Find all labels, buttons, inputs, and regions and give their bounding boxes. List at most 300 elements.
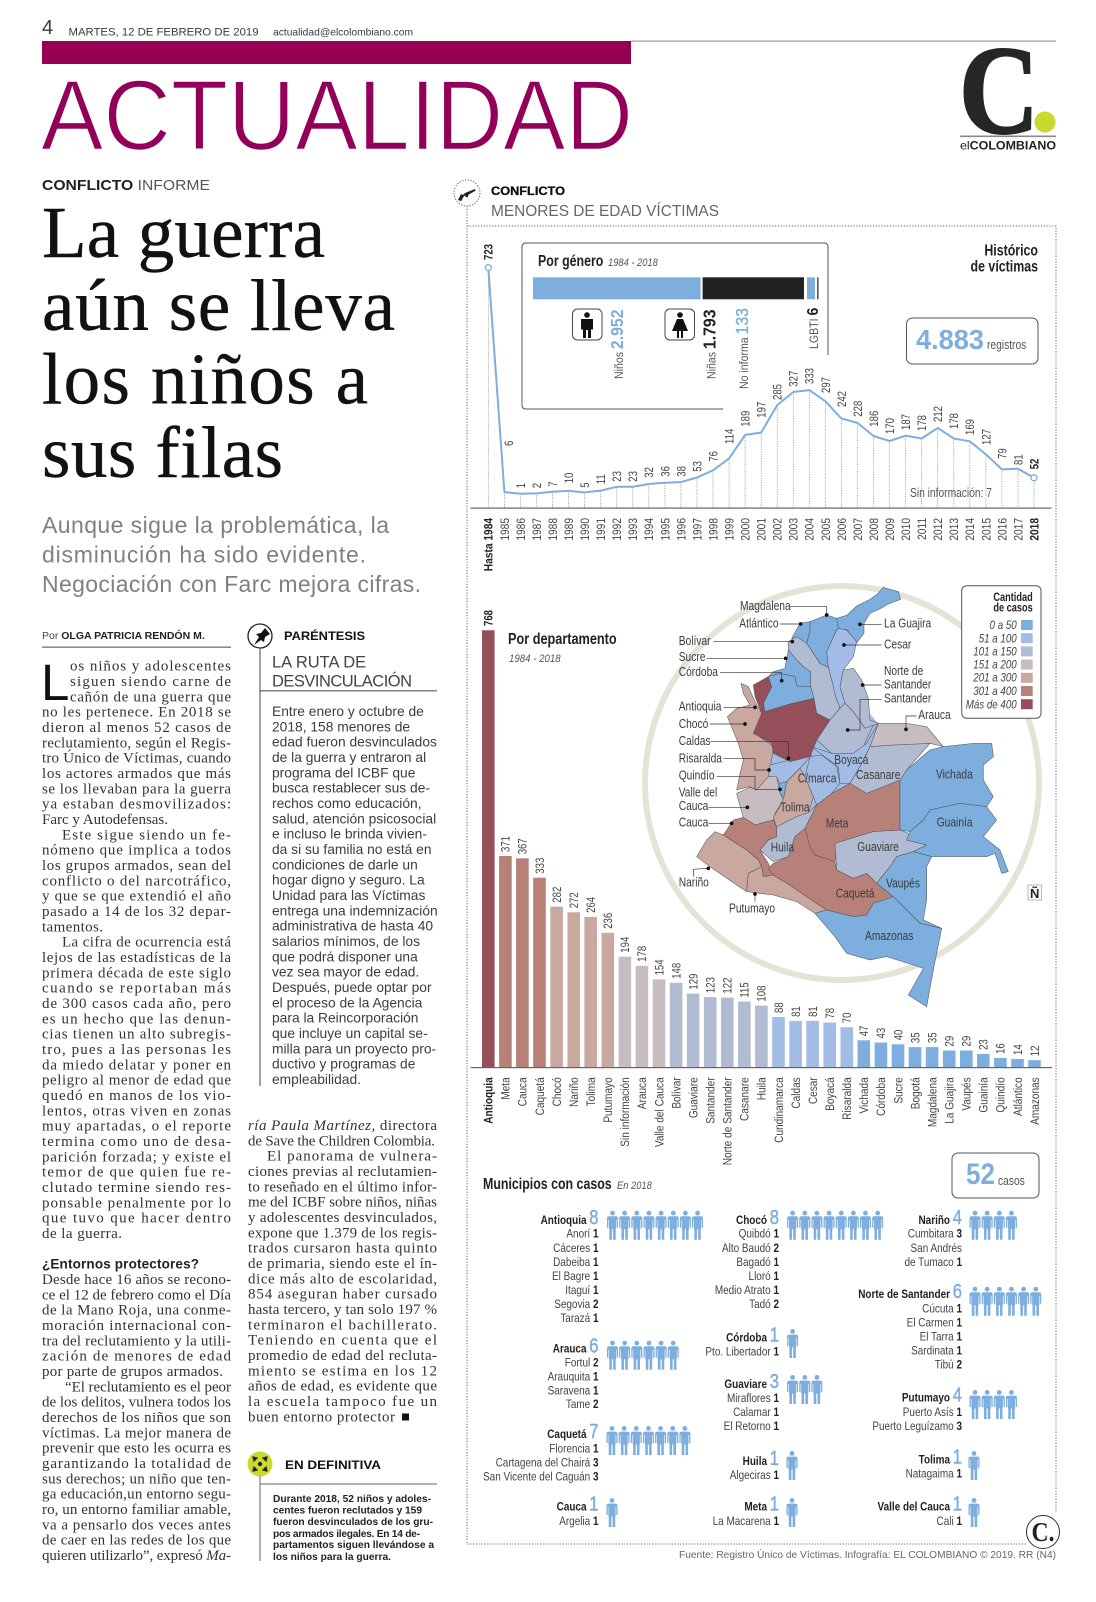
chart value labels: 5 xyxy=(579,482,592,488)
municipios: Caquetá: Caquetá 7 xyxy=(547,1420,598,1442)
map labels: Vichada xyxy=(936,769,973,782)
section title: ACTUALIDAD xyxy=(41,60,633,170)
bar value labels: 43 xyxy=(875,1028,889,1038)
rotated gender figures: Niños 2.952 xyxy=(607,309,627,379)
chart value labels: 76 xyxy=(707,451,721,462)
chart year axis labels: 2017 xyxy=(1013,518,1026,541)
callout: 4.883 registros: 4.883 xyxy=(916,324,984,355)
map labels: Cauca xyxy=(679,800,709,813)
page header strip: 4 xyxy=(42,17,53,39)
map labels: Vaupés xyxy=(886,878,920,891)
callout: 52 casos: casos xyxy=(998,1175,1025,1188)
chart value labels: 189 xyxy=(740,411,753,427)
map leader lines xyxy=(693,607,917,902)
department names: Bolívar xyxy=(671,1077,684,1109)
callout: 4.883 registros xyxy=(906,318,1038,364)
article column 1: dieron al menos 52 casos de xyxy=(42,720,231,736)
chart year axis labels: 2007 xyxy=(852,518,865,541)
article column 1: tro, pues a las personas les xyxy=(42,1042,231,1058)
callout: 52 casos: 52 xyxy=(966,1158,995,1191)
municipios: Córdoba: Pto. Libertador 1 xyxy=(705,1346,779,1359)
chart value labels: 38 xyxy=(675,466,689,477)
bar value labels: 23 xyxy=(978,1039,991,1050)
chart year axis labels: 2012 xyxy=(932,518,945,541)
panel: paréntesis: edad fueron desvinculados xyxy=(272,735,437,750)
article column 1: “El reclutamiento es el peor xyxy=(65,1379,231,1395)
article column 1: cuando se reportaban más xyxy=(42,981,231,997)
bar value labels: 154 xyxy=(653,959,667,975)
municipios: Huila xyxy=(730,1447,798,1482)
chart year axis labels: 1996 xyxy=(676,518,689,541)
department names: Guainía xyxy=(978,1077,991,1113)
bar value labels: 108 xyxy=(756,986,769,1002)
map legend: 0 a 50 xyxy=(990,619,1017,632)
article column 1: La cifra de ocurrencia está xyxy=(62,935,231,951)
panel: paréntesis xyxy=(248,624,438,1087)
map legend: Más de 400 xyxy=(966,699,1017,712)
chart value labels: 186 xyxy=(868,411,881,427)
municipios: Norte de Santander: Norte de Santander 6 xyxy=(858,1280,962,1302)
bar value labels: 35 xyxy=(909,1032,923,1043)
subheading: ¿Entornos protectores? xyxy=(42,1256,199,1272)
headline xyxy=(42,192,395,493)
department names xyxy=(483,1077,1042,1165)
article column 1: moración internacional con- xyxy=(42,1318,231,1334)
bar value labels: 81 xyxy=(790,1006,803,1017)
municipios: Tolima xyxy=(906,1445,980,1481)
municipios: Antioquia: Itaguí 1 xyxy=(565,1284,598,1297)
municipios: Guaviare: Guaviare 3 xyxy=(724,1370,779,1392)
article column 2: buen entorno protector xyxy=(248,1409,395,1425)
department names: Cesar xyxy=(807,1077,820,1104)
chart year axis labels: 2002 xyxy=(772,518,785,541)
chart year axis labels: 1999 xyxy=(724,518,737,541)
map labels: Putumayo xyxy=(729,903,775,916)
map labels: Atlántico xyxy=(739,617,779,631)
map labels xyxy=(679,600,973,943)
map labels: Amazonas xyxy=(865,930,914,943)
municipios: Chocó xyxy=(715,1206,883,1311)
map labels: Norte de xyxy=(884,665,923,678)
chart value labels: 52 xyxy=(1028,459,1042,469)
panel: paréntesis: hogar digno y seguro. La xyxy=(272,873,425,888)
department polygons xyxy=(693,587,1008,1007)
municipios: Córdoba: Córdoba 1 xyxy=(726,1323,779,1346)
municipios: Antioquia: El Bagre 1 xyxy=(552,1270,598,1283)
municipios: Putumayo: Puerto Leguízamo 3 xyxy=(872,1420,962,1433)
map labels: Caldas xyxy=(679,735,711,748)
panel: paréntesis: salud, atención psicosocial xyxy=(272,811,436,826)
bar value labels: 16 xyxy=(995,1043,1008,1054)
municipios: Putumayo: Puerto Asís 1 xyxy=(903,1406,962,1419)
article column 1: conflicto o del narcotráfico, xyxy=(42,873,231,889)
municipios: Meta xyxy=(713,1492,798,1528)
panel: paréntesis: Entre enero y octubre de xyxy=(272,704,424,719)
article column 2: años de edad, es evidente que xyxy=(248,1379,437,1395)
bar value labels: 194 xyxy=(619,937,633,953)
chart year axis labels: 2006 xyxy=(836,518,849,541)
panel: en definitiva: Durante 2018, 52 niños y adoles- xyxy=(273,1494,431,1505)
rotated gender figures: No informa 133 xyxy=(732,308,752,389)
bar value labels: 47 xyxy=(858,1026,871,1036)
logo: El Colombiano: C xyxy=(959,22,1039,161)
article column 1: tamentos. xyxy=(42,919,103,935)
map legend: 101 a 150 xyxy=(973,646,1017,659)
logo badge: C. xyxy=(1032,1517,1054,1547)
municipios: Antioquia: Cáceres 1 xyxy=(553,1242,598,1255)
municipios: Caquetá xyxy=(483,1420,690,1484)
rotated gender figures: LGBTI 6 xyxy=(804,308,822,349)
chart value labels: 285 xyxy=(772,384,785,400)
logo: El Colombiano: elCOLOMBIANO xyxy=(960,138,1056,152)
infographic header: CONFLICTO xyxy=(491,184,565,198)
chart value labels: 10 xyxy=(563,473,576,483)
panel: paréntesis: administrativa de hasta 40 xyxy=(272,919,433,934)
chart value labels: 2 xyxy=(531,483,544,488)
bar value labels: 14 xyxy=(1012,1044,1025,1055)
panel: municipios heading: Municipios con casos xyxy=(483,1175,612,1192)
article column 1: da miedo delatar y poner en xyxy=(42,1057,232,1073)
chart value labels: 327 xyxy=(788,371,801,387)
deck: Aunque sigue la problemática, la xyxy=(42,512,389,538)
municipios: Cauca: Cauca 1 xyxy=(557,1492,598,1515)
article column 2: me del ICBF sobre niños, niñas xyxy=(248,1195,437,1211)
heading: histórico de víctimas: de víctimas xyxy=(971,257,1038,275)
bar value labels: 81 xyxy=(807,1006,820,1017)
panel: en definitiva: pos armados ilegales. En 14 de- xyxy=(273,1529,420,1540)
map labels: Casanare xyxy=(856,769,900,782)
bar value labels: 122 xyxy=(722,978,735,994)
municipios: Norte de Santander: Cúcuta 1 xyxy=(922,1303,962,1316)
chart year axis labels: 1991 xyxy=(595,518,608,541)
chart value labels: 723 xyxy=(483,244,496,260)
municipios: Antioquia: Tarazá 1 xyxy=(560,1312,598,1325)
chart year axis labels: 2013 xyxy=(949,518,961,541)
chart year axis labels: 2010 xyxy=(900,518,913,541)
article column 1: es un hecho que las denun- xyxy=(42,1011,231,1027)
panel: paréntesis: que incluye un capital se- xyxy=(272,1026,428,1041)
map labels: Huila xyxy=(771,842,795,855)
map labels: Quindío xyxy=(679,769,715,783)
panel: paréntesis: DESVINCULACIÓN xyxy=(272,672,412,691)
icon: north mark xyxy=(1028,885,1042,901)
article column 1: víctimas. La mejor manera de xyxy=(42,1425,231,1441)
department names: Meta xyxy=(500,1077,513,1100)
article column 1: muy apartadas, o el reporte xyxy=(42,1119,231,1135)
chart value labels: 297 xyxy=(820,377,833,393)
icon: yellow badge xyxy=(248,1452,272,1476)
panel: en definitiva: centes fueron reclutados y 159 xyxy=(273,1505,422,1516)
department names: Caldas xyxy=(790,1077,803,1109)
map labels: C/marca xyxy=(798,773,837,786)
chart value labels: 36 xyxy=(659,466,673,477)
municipios: Valle del Cauca: Cali 1 xyxy=(937,1515,962,1528)
map labels: Chocó xyxy=(679,718,708,731)
article column 1: ponsable penalmente por lo xyxy=(42,1195,231,1211)
article column 1: de los delitos, vulnera todos los xyxy=(42,1395,231,1411)
department names: Norte de Santander xyxy=(722,1077,735,1165)
article column 1: pasado a 14 de los 32 depar- xyxy=(42,904,231,920)
department names: Bogotá xyxy=(910,1077,923,1109)
chart value labels: 333 xyxy=(804,368,817,384)
article column 1: cañón de una guerra que xyxy=(70,689,231,705)
article column 1: que tuvo que hacer dentro xyxy=(42,1211,231,1227)
chart year axis labels: 1992 xyxy=(611,518,624,541)
article column 1: peligro al menor de edad que xyxy=(42,1073,231,1089)
municipios: Antioquia: Antioquia 8 xyxy=(541,1206,598,1228)
chart value labels: 169 xyxy=(964,419,978,435)
article column 1: zación de menores de edad xyxy=(42,1349,232,1365)
municipios: Guaviare: Miraflores 1 xyxy=(727,1392,779,1405)
bar value labels: 768 xyxy=(483,610,496,626)
headline: sus filas xyxy=(42,412,283,493)
municipios: Chocó: Tadó 2 xyxy=(749,1298,779,1311)
map labels: Tolima xyxy=(780,802,810,815)
article column 1: os niños y adolescentes xyxy=(70,659,231,675)
infographic header: MENORES DE EDAD VÍCTIMAS xyxy=(491,201,719,220)
article column 2: la escuela tampoco fue un xyxy=(248,1394,438,1410)
headline: aún se lleva xyxy=(42,265,395,346)
department names: Casanare xyxy=(739,1077,752,1121)
line chart: histórico de víctimas xyxy=(470,244,1052,571)
map labels: Guainía xyxy=(937,817,973,830)
chart value labels: 79 xyxy=(996,448,1010,459)
note: sin información: Sin información: 7 xyxy=(910,487,992,500)
bar value labels: 129 xyxy=(687,974,701,990)
article column 1: quedó en manos de los vio- xyxy=(42,1088,231,1104)
panel: paréntesis: da si su familia no está en xyxy=(272,842,432,857)
municipios: Arauca: Saravena 1 xyxy=(548,1385,598,1398)
map labels: Meta xyxy=(826,818,849,831)
chart value labels: 242 xyxy=(836,391,849,407)
panel: paréntesis: que podrá disponer una xyxy=(272,949,418,964)
stacked gender bar xyxy=(533,277,819,299)
chart year axis labels xyxy=(483,517,1042,571)
municipios: Caquetá: Florencia 1 xyxy=(549,1443,598,1456)
municipios: Nariño: Cumbitara 3 xyxy=(908,1228,962,1241)
article column 1: ga educación,un entorno segu- xyxy=(42,1487,231,1503)
article column 1: cias tienen un alto subregis- xyxy=(42,1027,231,1043)
chart year axis labels: 1994 xyxy=(644,518,656,541)
chart value labels: 170 xyxy=(884,418,897,434)
bar value labels: 148 xyxy=(670,963,684,979)
map labels: Córdoba xyxy=(679,666,719,679)
map labels: Valle del xyxy=(679,787,717,800)
municipios: Norte de Santander xyxy=(858,1280,1041,1372)
department names: Vichada xyxy=(858,1077,871,1114)
panel: en definitiva: los niños para la guerra. xyxy=(273,1552,391,1563)
chart year axis labels: 2015 xyxy=(981,518,994,541)
municipios: Tolima: Tolima 1 xyxy=(919,1445,962,1468)
article column 1: tra del reclutamiento y la utili- xyxy=(42,1333,231,1349)
municipios: Caquetá: Cartagena del Chairá 3 xyxy=(496,1457,598,1470)
chart value labels: 7 xyxy=(547,481,560,487)
article column 1: de la guerra. xyxy=(42,1226,122,1242)
page header strip: actualidad@elcolombiano.com xyxy=(273,28,413,38)
heading xyxy=(508,631,617,665)
map legend: 201 a 300 xyxy=(972,672,1017,685)
article column 2: 854 aseguran haber cursado xyxy=(248,1287,437,1303)
map labels: Arauca xyxy=(918,709,951,722)
department names: Quindío xyxy=(995,1077,1008,1113)
panel: en definitiva: fueron desvinculados de los gru- xyxy=(273,1517,433,1528)
municipios: Guaviare: El Retorno 1 xyxy=(724,1420,779,1433)
municipios: Norte de Santander: Sardinata 1 xyxy=(911,1345,962,1358)
chart value labels xyxy=(483,244,1042,488)
article column 1: Farc y Autodefensas. xyxy=(42,812,168,828)
bar value labels: 88 xyxy=(773,1002,786,1013)
department names: Magdalena xyxy=(927,1077,940,1127)
panel: paréntesis: vez sea mayor de edad. xyxy=(272,965,419,980)
municipios: Nariño xyxy=(904,1206,1017,1269)
chart value labels: 127 xyxy=(980,429,994,445)
map labels: Risaralda xyxy=(679,752,723,766)
article column 1: ce el 12 de febrero como el Día xyxy=(42,1287,231,1303)
municipios: Chocó: Medio Atrato 1 xyxy=(715,1284,779,1297)
article column 2: de Save the Children Colombia. xyxy=(248,1133,435,1149)
chart year axis labels: 2004 xyxy=(804,518,817,541)
map labels: Magdalena xyxy=(740,600,791,613)
bars xyxy=(471,630,1052,1068)
bar value labels: 272 xyxy=(568,892,581,908)
article column 2: miento se estima en los 12 xyxy=(248,1363,437,1379)
map labels: Sucre xyxy=(679,651,705,664)
municipios: Huila: Algeciras 1 xyxy=(730,1469,779,1482)
municipios: Antioquia xyxy=(541,1206,703,1325)
callout: 4.883 registros: registros xyxy=(987,339,1027,352)
article column 1: no les pertenece. En 2018 se xyxy=(42,705,231,721)
article column 1: prevenir que esto les ocurra es xyxy=(42,1441,231,1457)
chart year axis labels: 2009 xyxy=(884,518,897,541)
panel: paréntesis: rechos como educación, xyxy=(272,796,422,811)
municipios: Chocó: Lloró 1 xyxy=(749,1270,779,1283)
article column 1: temor de que quien fue re- xyxy=(42,1165,231,1181)
bar value labels: 333 xyxy=(534,858,547,874)
bar value labels: 115 xyxy=(739,982,752,998)
chart year axis labels: 2011 xyxy=(916,518,929,540)
municipios: Antioquia: Segovia 2 xyxy=(554,1298,598,1311)
article column 1: por parte de grupos armados. xyxy=(42,1364,223,1380)
panel: paréntesis: entrega una indemnización xyxy=(272,903,438,918)
map of Colombia by department xyxy=(645,586,1039,1007)
chart year axis labels: 1985 xyxy=(499,518,512,541)
chart year axis labels: 2003 xyxy=(788,518,801,541)
municipios: Chocó: Bagadó 1 xyxy=(736,1256,779,1269)
map legend: 51 a 100 xyxy=(979,633,1017,646)
icon: pushpin xyxy=(248,624,272,648)
bar value labels: 264 xyxy=(585,897,598,913)
department names: Sucre xyxy=(893,1077,906,1104)
municipios: Tolima: Natagaima 1 xyxy=(906,1468,962,1481)
department names: Cundinamarca xyxy=(773,1077,786,1143)
panel: por género xyxy=(522,243,828,409)
panel: por género: 1984 - 2018 xyxy=(608,257,658,269)
article column 1: nómeno que implica a todos xyxy=(42,843,231,859)
chart year axis labels: 1990 xyxy=(579,518,592,541)
map labels: Guaviare xyxy=(857,841,899,854)
article column 2: expone que 1.379 de los regis- xyxy=(248,1225,437,1241)
icon: girl xyxy=(665,309,694,340)
bar value labels: 236 xyxy=(602,913,615,929)
department names: La Guajira xyxy=(944,1077,957,1124)
article column 2: to reseñado en el último infor- xyxy=(248,1179,437,1195)
municipios: Nariño: San Andrés xyxy=(911,1242,962,1255)
panel: paréntesis: LA RUTA DE xyxy=(272,654,366,672)
article column 1: reclutamiento, según el Regis- xyxy=(42,735,231,751)
map legend: 301 a 400 xyxy=(973,685,1017,698)
article column 1: los actores armados que más xyxy=(42,766,231,782)
chart year axis labels: 1989 xyxy=(563,518,576,541)
bar value labels: 78 xyxy=(824,1008,837,1019)
chart value labels: 187 xyxy=(900,414,913,430)
department names: Risaralda xyxy=(841,1077,854,1120)
article column 1: clutado termine siendo res- xyxy=(42,1180,231,1196)
municipios: Meta: Meta 1 xyxy=(744,1492,779,1515)
chart value labels: 178 xyxy=(948,413,962,429)
article column 1: sus derechos; un niño que ten- xyxy=(42,1471,231,1487)
municipios: Putumayo: Putumayo 4 xyxy=(902,1383,962,1406)
department names: Boyacá xyxy=(824,1077,837,1111)
municipios: Antioquia: Dabeiba 1 xyxy=(553,1256,598,1269)
article column 2: trados cursaron hasta quinto xyxy=(248,1241,437,1257)
panel: paréntesis: Después, puede optar por xyxy=(272,980,432,995)
department names: Putumayo xyxy=(602,1077,615,1123)
department names: Amazonas xyxy=(1029,1077,1042,1125)
bar value labels: 178 xyxy=(636,946,650,962)
panel: paréntesis: el proceso de la Agencia xyxy=(272,995,423,1010)
article column 1 xyxy=(41,654,232,1564)
bar value labels: 29 xyxy=(961,1036,974,1046)
panel: paréntesis: busca restablecer sus de- xyxy=(272,781,430,796)
map legend: Cantidad xyxy=(993,592,1033,604)
article column 2: ría Paula Martínez, directora xyxy=(248,1118,437,1134)
chart value labels: 81 xyxy=(1012,454,1026,465)
municipios: Chocó: Chocó 8 xyxy=(736,1206,779,1228)
panel: paréntesis: condiciones de darle un xyxy=(272,857,418,872)
article column 2: de primaria, siendo este el ín- xyxy=(248,1256,437,1272)
municipios: Valle del Cauca xyxy=(878,1492,980,1528)
chart value labels: 1 xyxy=(515,483,528,488)
article column 1: y que se que extendió el año xyxy=(42,889,231,905)
article column 2: ciones previas al reclutamien- xyxy=(248,1164,437,1180)
headline: los niños a xyxy=(42,338,368,420)
article column 1: de caer en las redes de los que xyxy=(42,1533,231,1549)
chart year axis labels: 2016 xyxy=(997,518,1010,541)
heading: histórico de víctimas xyxy=(971,241,1038,275)
chart value labels: 228 xyxy=(852,401,865,417)
bar value labels: 70 xyxy=(841,1013,854,1023)
panel: municipios heading: En 2018 xyxy=(617,1180,652,1192)
chart value labels: 178 xyxy=(916,415,929,431)
bar chart: por departamento xyxy=(471,610,1052,1165)
chart value labels: 197 xyxy=(756,402,769,418)
municipios: Putumayo xyxy=(872,1383,1017,1433)
article column 2: dice más alto de escolaridad, xyxy=(248,1271,437,1287)
callout: 52 casos xyxy=(952,1153,1039,1198)
department names: Antioquia xyxy=(483,1077,496,1124)
bar value labels: 12 xyxy=(1029,1046,1042,1056)
municipios: Norte de Santander: El Carmen 1 xyxy=(907,1317,962,1330)
panel: por género: Por género xyxy=(538,252,604,269)
bar value labels: 371 xyxy=(500,836,513,852)
panel: en definitiva xyxy=(248,1452,437,1563)
article column 1: de 300 casos cada año, pero xyxy=(42,996,231,1012)
infographic header xyxy=(454,180,719,220)
department names: Arauca xyxy=(636,1077,649,1109)
kicker: CONFLICTO INFORME xyxy=(42,177,210,194)
municipios: Arauca: Arauca 6 xyxy=(553,1334,598,1357)
rotated gender figures xyxy=(607,308,822,389)
